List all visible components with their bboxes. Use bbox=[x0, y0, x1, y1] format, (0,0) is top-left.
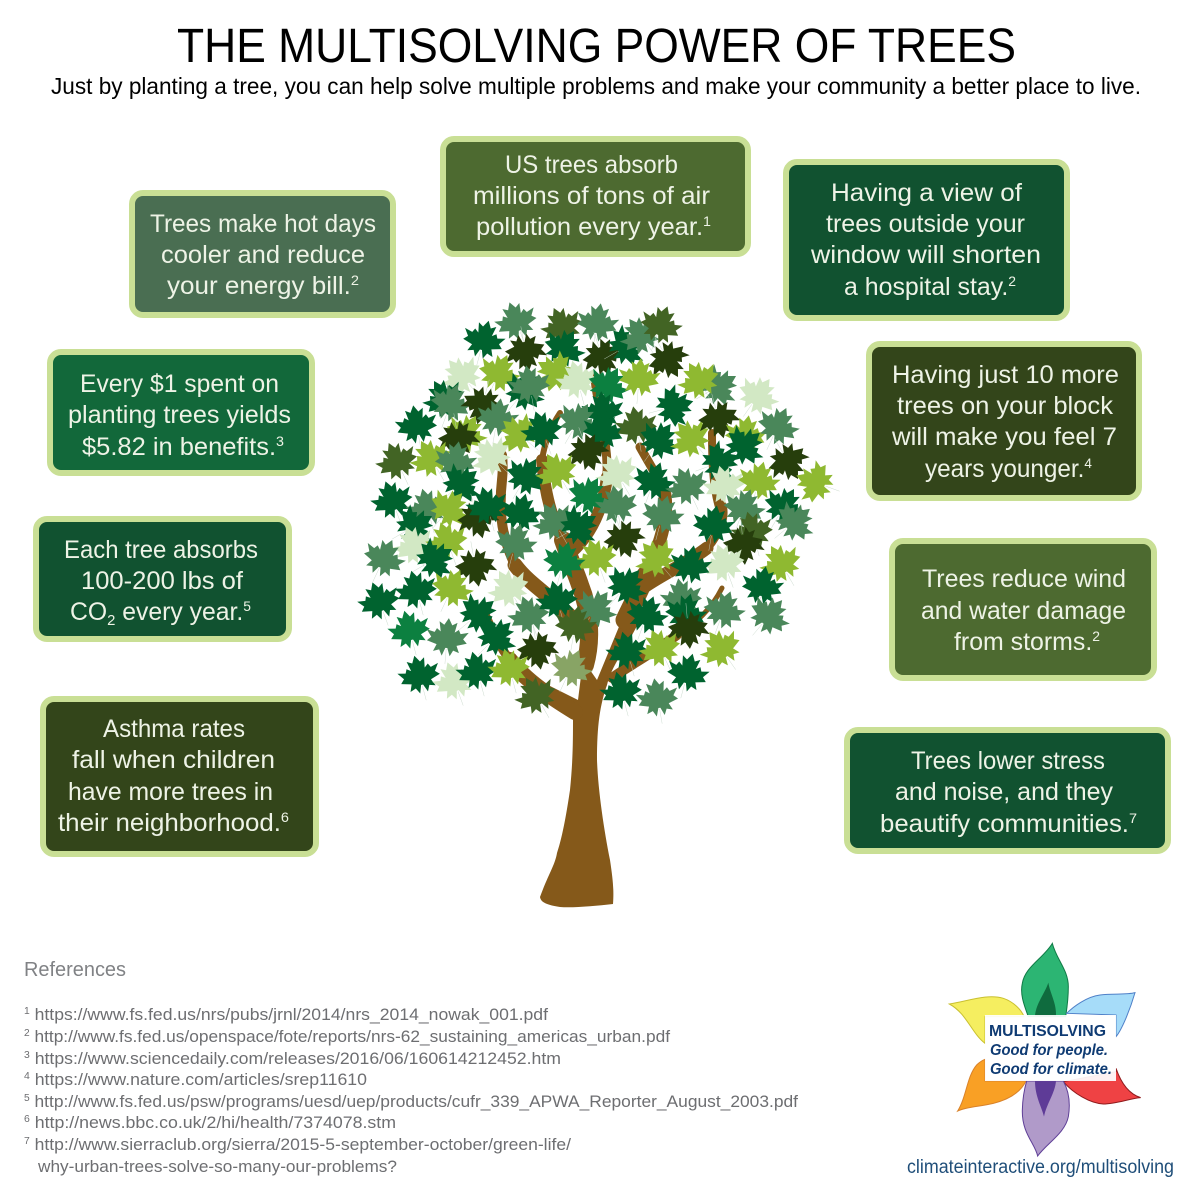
title: THE MULTISOLVING POWER OF TREES bbox=[177, 20, 1016, 73]
box: hospital stay: 2 bbox=[1008, 273, 1016, 289]
box: asthma bbox=[43, 699, 316, 854]
box: hospital stay: a hospital stay. bbox=[844, 273, 1009, 301]
box: hospital stay: trees outside your bbox=[826, 210, 1025, 238]
references list: 3 bbox=[24, 1050, 30, 1061]
box: planting benefits: Every $1 spent on bbox=[80, 370, 279, 398]
website address: climateinteractive.org/multisolving bbox=[907, 1157, 1174, 1178]
box: air pollution: US trees absorb bbox=[505, 151, 678, 179]
references list: 6 bbox=[24, 1114, 30, 1125]
box: planting benefits: $5.82 in benefits. bbox=[82, 433, 272, 461]
logo wordmark: MULTISOLVING bbox=[989, 1023, 1106, 1040]
box: storm damage bbox=[892, 541, 1154, 678]
references list: 2 bbox=[24, 1028, 30, 1039]
box: carbon dioxide bbox=[36, 519, 289, 639]
box: cooler days: 2 bbox=[351, 272, 359, 288]
logo tagline one: Good for people. bbox=[990, 1042, 1108, 1059]
box: air pollution: pollution every year. bbox=[476, 213, 698, 241]
box: stress and noise: and noise, and they bbox=[895, 778, 1113, 806]
box: cooler days: your energy bill. bbox=[167, 272, 343, 300]
box: carbon dioxide: CO bbox=[70, 598, 108, 626]
references list: 5 bbox=[24, 1093, 30, 1104]
box: stress and noise: Trees lower stress bbox=[911, 747, 1105, 775]
references list bbox=[24, 1005, 798, 1176]
box: asthma: fall when children bbox=[72, 746, 275, 774]
references list: 4 bbox=[24, 1071, 30, 1082]
box: stress and noise bbox=[847, 730, 1168, 851]
logo petals bbox=[949, 943, 1141, 1156]
box: carbon dioxide: Each tree absorbs bbox=[64, 536, 258, 564]
references list: http://www.fs.fed.us/psw/programs/uesd/uep/products/cufr_339_APWA_Reporter_August_2003.pdf bbox=[30, 1092, 798, 1111]
box: feel younger: will make you feel 7 bbox=[891, 423, 1117, 451]
box: feel younger: Having just 10 more bbox=[892, 361, 1119, 389]
references list: http://www.sierraclub.org/sierra/2015-5-september-october/green-life/ bbox=[30, 1135, 571, 1154]
box: cooler days: Trees make hot days bbox=[150, 210, 376, 238]
box: storm damage: and water damage bbox=[921, 597, 1126, 625]
box: carbon dioxide: every year. bbox=[115, 598, 243, 626]
box: carbon dioxide: 5 bbox=[243, 598, 251, 614]
box: asthma: 6 bbox=[281, 809, 289, 825]
subtitle: Just by planting a tree, you can help solve multiple problems and make your community a better place to live. bbox=[51, 73, 1141, 99]
box: storm damage: from storms. bbox=[954, 628, 1093, 656]
box: planting benefits: 3 bbox=[276, 433, 284, 449]
box: feel younger: trees on your block bbox=[897, 392, 1114, 420]
box: hospital stay: Having a view of bbox=[831, 179, 1022, 207]
references heading: References bbox=[24, 959, 126, 981]
box: planting benefits: planting trees yields bbox=[68, 401, 291, 429]
box: asthma: their neighborhood. bbox=[58, 809, 273, 837]
box: hospital stay: window will shorten bbox=[810, 241, 1041, 269]
references list: http://www.fs.fed.us/openspace/fote/reports/nrs-62_sustaining_americas_urban.pdf bbox=[30, 1027, 670, 1046]
box: cooler days: cooler and reduce bbox=[161, 241, 365, 269]
box: planting benefits bbox=[50, 352, 312, 473]
multisolving flower logo bbox=[949, 943, 1141, 1156]
box: carbon dioxide: 100-200 lbs of bbox=[81, 567, 243, 595]
box: feel younger bbox=[869, 344, 1139, 498]
references list: http://news.bbc.co.uk/2/hi/health/7374078.stm bbox=[30, 1113, 396, 1132]
tree trunk and branches bbox=[483, 373, 723, 907]
box: storm damage: 2 bbox=[1092, 628, 1100, 644]
references list: https://www.nature.com/articles/srep11610 bbox=[30, 1070, 367, 1089]
box: air pollution: millions of tons of air bbox=[473, 182, 710, 210]
logo tagline two: Good for climate. bbox=[990, 1061, 1112, 1078]
box: feel younger: 4 bbox=[1084, 455, 1092, 471]
box: stress and noise: beautify communities. bbox=[880, 810, 1122, 838]
box: cooler days bbox=[132, 193, 393, 315]
references list: https://www.sciencedaily.com/releases/2016/06/160614212452.htm bbox=[30, 1049, 561, 1068]
logo label panel bbox=[985, 1015, 1116, 1081]
box: asthma: Asthma rates bbox=[103, 715, 245, 743]
box: hospital stay bbox=[786, 162, 1067, 318]
canopy of maple leaves bbox=[353, 295, 847, 728]
box: storm damage: Trees reduce wind bbox=[922, 565, 1126, 593]
box: feel younger: years younger. bbox=[925, 455, 1089, 483]
box: air pollution: 1 bbox=[703, 213, 711, 229]
references list: 1 bbox=[24, 1006, 30, 1017]
box: asthma: have more trees in bbox=[68, 778, 273, 806]
box: stress and noise: 7 bbox=[1129, 810, 1137, 826]
tree bbox=[353, 295, 847, 907]
references list: https://www.fs.fed.us/nrs/pubs/jrnl/2014/nrs_2014_nowak_001.pdf bbox=[30, 1005, 548, 1024]
box: air pollution bbox=[443, 139, 748, 254]
box: carbon dioxide: 2 bbox=[107, 612, 115, 629]
references list: why-urban-trees-solve-so-many-our-problems? bbox=[37, 1157, 397, 1176]
references list: 7 bbox=[24, 1136, 30, 1147]
